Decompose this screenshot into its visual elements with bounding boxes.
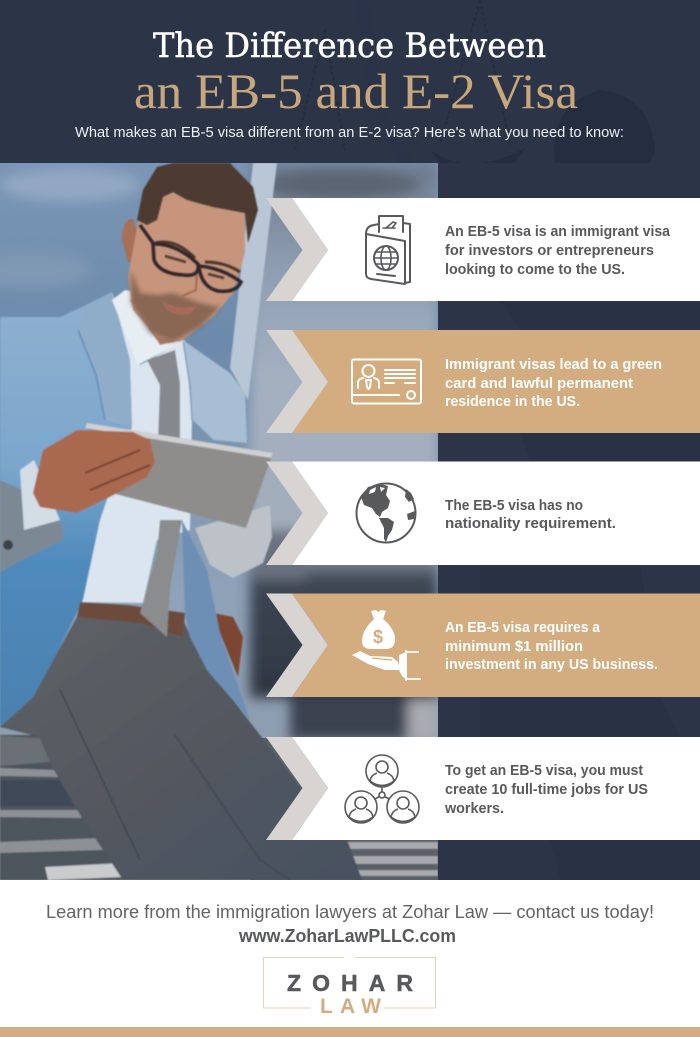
call to action: Learn more from the immigration lawyers at Zohar Law — contact us today! xyxy=(46,901,654,922)
eyes and brows xyxy=(155,242,240,272)
sleeve left xyxy=(0,480,63,572)
icon: globe xyxy=(356,484,416,542)
chevron arrow 4 xyxy=(266,594,328,697)
sleeve right xyxy=(195,505,272,578)
text: band 1: for investors or entrepreneurs xyxy=(445,243,654,259)
hair xyxy=(137,163,258,243)
icon: connected people xyxy=(345,755,419,823)
nose shadow xyxy=(182,268,197,296)
chevron arrow 2 xyxy=(266,330,328,433)
text: band 4: minimum $1 million xyxy=(445,639,583,655)
text: band 1: An EB-5 visa is an immigrant visa xyxy=(445,224,671,240)
text: band 3: nationality requirement. xyxy=(445,516,616,532)
band 2: green card xyxy=(266,330,700,433)
chevron arrow 5 xyxy=(266,737,328,840)
shirt xyxy=(80,292,192,603)
text: band 5: create 10 full-time jobs for US xyxy=(445,782,648,798)
chevron arrow 3 xyxy=(266,462,328,565)
text: band 5: To get an EB-5 visa, you must xyxy=(445,763,643,779)
icon: money bag on a hand xyxy=(352,610,421,681)
text: band 3: The EB-5 visa has no xyxy=(445,498,583,514)
subtitle: What makes an EB-5 visa different from an E-2 visa? Here's what you need to know: xyxy=(75,124,624,141)
text: band 2: card and lawful permanent xyxy=(445,376,633,392)
logo: Zohar Law xyxy=(264,958,436,1018)
text: band 5 xyxy=(444,763,648,817)
footer gold bar xyxy=(0,1027,700,1037)
text: band 4 xyxy=(445,620,658,673)
band 3: no nationality requirement xyxy=(266,462,700,565)
text: band 5: workers. xyxy=(444,801,504,817)
jacket xyxy=(0,292,132,727)
tie xyxy=(147,350,180,440)
band 1: EB-5 immigrant visa xyxy=(266,198,700,301)
band 5: job creation xyxy=(266,737,700,840)
icon: passport xyxy=(366,216,410,284)
logo: Zohar Law: LAW xyxy=(320,995,381,1018)
beard xyxy=(131,270,220,342)
panel: right-edge navy strip xyxy=(438,163,439,880)
face xyxy=(128,192,245,342)
neck xyxy=(112,290,185,365)
panel: footer xyxy=(0,880,700,1027)
text: band 4: investment in any US business. xyxy=(445,657,658,673)
belt xyxy=(77,602,185,637)
text: band 1: looking to come to the US. xyxy=(445,262,625,278)
band 4: minimum investment xyxy=(266,594,700,697)
text: band 2 xyxy=(445,357,662,410)
logo: Zohar Law: ZOHAR xyxy=(287,970,413,996)
neck skin xyxy=(130,300,177,346)
hand xyxy=(33,430,155,513)
trousers xyxy=(0,617,362,880)
bench xyxy=(0,735,130,880)
text: band 2: Immigrant visas lead to a green xyxy=(445,357,662,373)
title: first line: The Difference Between xyxy=(153,26,546,66)
chevron arrow 1 xyxy=(266,198,328,301)
title: second line: an EB-5 and E-2 Visa xyxy=(134,63,578,119)
text: band 4: An EB-5 visa requires a xyxy=(445,620,601,636)
glasses xyxy=(140,225,241,291)
ear xyxy=(122,219,140,263)
bag strap xyxy=(213,613,243,677)
mouth xyxy=(162,301,197,315)
text: band 3 xyxy=(445,498,616,532)
text: band 1 xyxy=(445,224,671,278)
icon: id card xyxy=(352,360,421,404)
text: band 2: residence in the US. xyxy=(445,394,580,410)
tablet xyxy=(87,423,273,528)
website: www.ZoharLawPLLC.com xyxy=(238,925,456,946)
pillar xyxy=(230,163,277,400)
icon: money bag on a hand: $ xyxy=(373,627,383,647)
photo: businessman reading a tablet xyxy=(0,163,438,880)
cuff xyxy=(20,460,60,530)
